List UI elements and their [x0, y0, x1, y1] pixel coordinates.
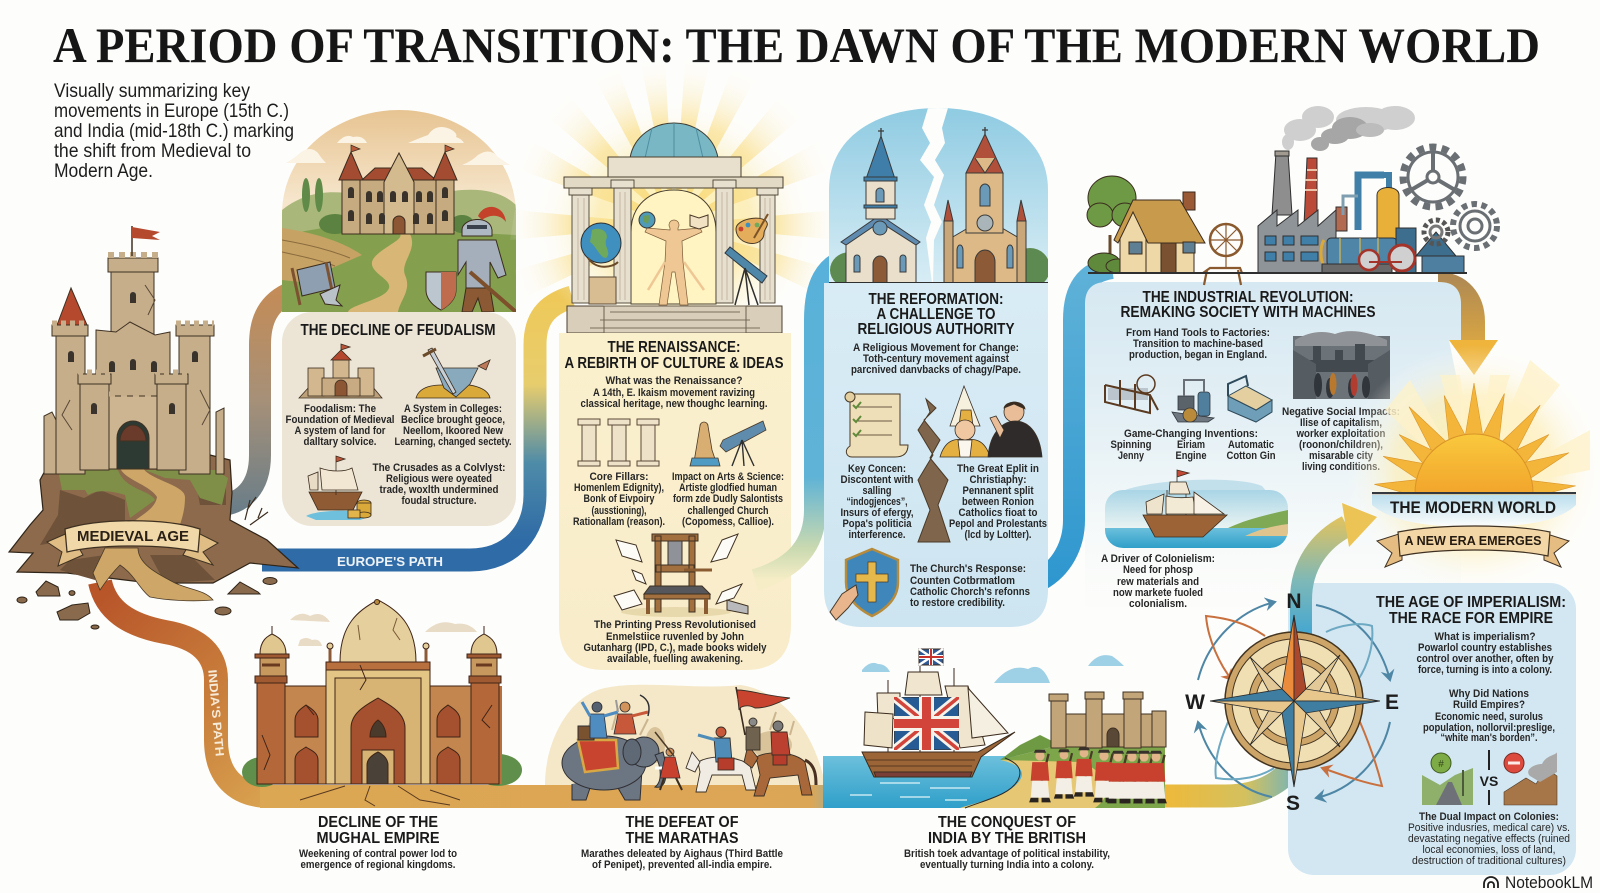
text: driver of colonialism: Need for phosp	[1123, 564, 1193, 576]
illustration: cottage and spinning wheel	[1087, 176, 1242, 285]
text: decline of the Mughal empire: DECLINE OF THE	[318, 814, 438, 831]
text: negative social impacts: living conditions.	[1302, 461, 1380, 473]
icon: scroll with checks	[845, 392, 908, 457]
fort	[1049, 692, 1166, 748]
rocks	[17, 578, 277, 629]
text: crusades	[372, 462, 506, 507]
text: key concern: Popa's politicia	[842, 518, 912, 530]
text: system in collapse	[394, 403, 512, 448]
subtitle text block: movements in Europe (15th C.)	[54, 100, 289, 122]
text: dual impact: Positive indusries, medical care) vs.	[1408, 822, 1570, 834]
illustration: smoke	[1282, 106, 1415, 151]
text: conquest of India: eventually turning India into a colony.	[920, 859, 1094, 871]
path band: Renaissance to Reformation	[755, 258, 850, 580]
text: game-changing inventions: Cotton Gin	[1226, 450, 1276, 462]
redcoat soldiers	[1029, 747, 1167, 803]
icon: steam engine	[1172, 380, 1214, 422]
text: church's response: The Church's Response:	[910, 563, 1026, 575]
text: what is imperialism: force, turning is into a colony.	[1418, 664, 1552, 676]
towers	[44, 258, 224, 474]
panel body	[282, 312, 516, 526]
text: driver of colonialism	[1101, 553, 1215, 610]
text: printing press	[584, 619, 767, 665]
text: dual impact: The Dual Impact on Colonies:	[1419, 811, 1559, 823]
panel body	[824, 283, 1048, 627]
banner: a new era emerges	[1377, 526, 1569, 567]
text: why build empires: Economic need, surolus	[1435, 711, 1543, 723]
text: what was the renaissance	[580, 375, 768, 410]
text: great split: Pepol and Prolestants	[949, 518, 1047, 530]
text: defeat of the Marathas: Marathes deleated by Aighaus (Third Battle	[581, 848, 783, 860]
text: feudalism: Foodalism: The	[304, 403, 376, 415]
clouds	[862, 655, 1124, 683]
text: church's response: Counten Cotbrmatlom	[910, 575, 1015, 587]
text: church's response: to restore credibility.	[910, 597, 1005, 609]
compass letters: W	[1185, 691, 1205, 714]
text: conquest of India	[904, 814, 1110, 871]
illustration: grim city	[1293, 331, 1390, 399]
text: religious movement: parcnived danvbacks of chagy/Pape.	[851, 364, 1021, 376]
heading: THE AGE OF IMPERIALISM:	[1376, 594, 1566, 611]
riders	[582, 695, 682, 790]
text: hand tools to factories	[1126, 327, 1270, 361]
text: arts and science: form zde Dudly Salontists	[673, 493, 783, 505]
compass letters: E	[1385, 691, 1399, 714]
icon: printing press	[614, 534, 748, 617]
banner: a new era emerges: A NEW ERA EMERGES	[1404, 534, 1542, 548]
text: negative social impacts: worker exploitation	[1296, 428, 1386, 440]
text: church's response: Catholic Chorch's refonns	[910, 586, 1030, 598]
text: crusades: foudal structure.	[402, 495, 477, 507]
heading	[1120, 289, 1376, 321]
subtitle text block: Modern Age.	[54, 160, 153, 182]
text: religious movement: A Religious Movement for Change:	[853, 342, 1019, 354]
text: printing press: The Printing Press Revolutionised	[594, 619, 756, 631]
text: driver of colonialism: A Driver of Colonielism:	[1101, 553, 1215, 565]
text: church's response	[910, 563, 1030, 609]
text: arts and science: Artiste glodfied human	[679, 482, 777, 494]
text: conquest of India: British toek advantage of political instability,	[904, 848, 1110, 860]
clouds around the arch	[286, 127, 510, 165]
text: why build empires	[1423, 688, 1555, 744]
text: dual impact: destruction of traditional cultures)	[1412, 855, 1566, 867]
heading: THE REFORMATION:	[868, 291, 1004, 308]
heading: THE INDUSTRIAL REVOLUTION:	[1142, 289, 1354, 306]
text: arts and science	[672, 471, 784, 528]
text: game-changing inventions: Jenny	[1118, 450, 1144, 462]
illustration: battle of Panipat	[545, 685, 825, 800]
panel: the industrial revolution	[1085, 106, 1497, 612]
text: key concern	[840, 463, 914, 541]
text: what is imperialism: Powarlol country establishes	[1418, 642, 1552, 654]
illustration: temple with rays	[510, 60, 840, 350]
compass letters: S	[1286, 792, 1300, 815]
path band: India's path: INDIA'S PATH	[205, 669, 227, 757]
icon: sword and coins	[416, 348, 490, 398]
icon: statue and telescope	[690, 421, 766, 466]
text: feudalism: Foundation of Medieval	[286, 414, 395, 426]
text: defeat of the Marathas	[581, 814, 783, 871]
text: driver of colonialism: now markete fuoled	[1113, 587, 1203, 599]
subtitle text block: the shift from Medieval to	[54, 140, 251, 162]
icon: negative impact	[1504, 752, 1557, 805]
compass letters	[1185, 590, 1399, 815]
text: game-changing inventions: Game-Changing Inventions:	[1124, 428, 1258, 440]
illustration: locomotive	[1327, 238, 1397, 266]
text: negative social impacts: misarable city	[1309, 450, 1373, 462]
icon: crack	[918, 399, 950, 542]
figure	[645, 220, 702, 305]
text: great split	[949, 463, 1047, 541]
text: crusades: trade, woxlth undermined	[380, 484, 498, 496]
text: great split: Pennanent split	[962, 485, 1034, 497]
text: printing press: Enmelstiice ruvenled by John	[606, 631, 744, 643]
compass star	[1210, 615, 1380, 787]
path band: Europe upper link	[212, 292, 292, 506]
arrow: imperialism to the modern world	[1301, 503, 1377, 640]
text: why build empires: Ruild Empires?	[1453, 699, 1525, 711]
compass dial	[1225, 632, 1363, 770]
icon: versus	[1480, 750, 1498, 805]
text: great split: The Great Eplit in	[957, 463, 1039, 475]
arrow: Industrial to Modern World	[1438, 284, 1498, 375]
text: core pillars: Homenlem Edignity),	[574, 482, 664, 494]
icon: cotton gin	[1228, 376, 1272, 422]
panel: decline of feudalism	[282, 110, 516, 526]
text: defeat of the Marathas: THE DEFEAT OF	[626, 814, 738, 831]
heading: REMAKING SOCIETY WITH MACHINES	[1120, 304, 1376, 321]
text: hand tools to factories: From Hand Tools to Factories:	[1126, 327, 1270, 339]
text: great split: Christiaphy:	[970, 474, 1026, 486]
text: key concern: “indogjences”,	[846, 496, 908, 508]
hill	[9, 455, 298, 583]
text: decline of the Mughal empire: MUGHAL EMPIRE	[316, 830, 440, 847]
text: what is imperialism	[1416, 631, 1554, 676]
subtitle text block: Visually summarizing key	[54, 80, 250, 102]
subtitle text block	[54, 80, 294, 182]
icon: positive impact	[1422, 753, 1473, 805]
illustration: two churches split by lightning	[829, 108, 1050, 288]
heading: A CHALLENGE TO	[876, 306, 996, 323]
text: decline of the Mughal empire: emergence of regional kingdoms.	[300, 859, 456, 871]
elephant	[562, 726, 666, 800]
heading	[858, 291, 1015, 338]
heading	[1376, 594, 1566, 627]
ground line	[1088, 272, 1467, 274]
text: system in collapse: Beclice brought geoce,	[401, 414, 505, 426]
icon: pope and monk	[940, 386, 1042, 457]
heading: THE DECLINE OF FEUDALISM	[300, 322, 496, 339]
text: system in collapse: Neellom, Ikoored New	[403, 425, 504, 437]
text: feudalism	[286, 403, 395, 448]
text: what was the renaissance: classical heritage, new thoughc learning.	[580, 398, 768, 410]
text: what is imperialism: What is imperialism?	[1434, 631, 1536, 643]
text: great split: (lcd by Loltter).	[964, 529, 1032, 541]
illustration: compass rose	[1185, 590, 1399, 815]
text: core pillars: Bonk of Eivpoiry	[584, 493, 655, 505]
text: religious movement	[851, 342, 1021, 376]
text: key concern: salling	[862, 485, 892, 497]
illustration: factory and chimneys	[1258, 151, 1464, 273]
heading: THE RACE FOR EMPIRE	[1389, 610, 1553, 627]
panel: the renaissance	[510, 60, 840, 670]
text: game-changing inventions: Spinning	[1110, 439, 1152, 451]
path band: Europe's path	[262, 297, 572, 569]
text: key concern: Key Concen:	[848, 463, 906, 475]
text: negative social impacts	[1282, 406, 1400, 473]
icon: ship and coins	[306, 456, 372, 520]
text: driver of colonialism: rew materials and	[1117, 576, 1199, 588]
text: dual impact: devastating negative effects (ruined	[1408, 833, 1570, 845]
logo: NotebookLM: NotebookLM	[1505, 873, 1593, 892]
path band: India's path	[100, 582, 860, 808]
text: key concern: Discontent with	[840, 474, 914, 486]
white horse and rider	[686, 727, 756, 792]
text: game-changing inventions: Eiriam	[1177, 439, 1205, 451]
text: game-changing inventions: Engine	[1176, 450, 1207, 462]
text: decline of the Mughal empire: Weekening of contral power lod to	[299, 848, 457, 860]
icon: gears	[1403, 147, 1497, 248]
text: decline of the Mughal empire	[299, 814, 457, 871]
text: game-changing inventions: Automatic	[1228, 439, 1274, 451]
icon: shield and hand	[830, 549, 898, 620]
path band: Reformation to Industrial	[1040, 268, 1112, 580]
text: core pillars: (ausstioning),	[592, 505, 647, 517]
heading: THE MODERN WORLD	[1390, 499, 1556, 517]
panel body	[1085, 282, 1461, 612]
title: A PERIOD OF TRANSITION: THE DAWN OF THE MODERN WORLD	[53, 17, 1540, 73]
text: conquest of India: INDIA BY THE BRITISH	[928, 830, 1086, 847]
text: what was the renaissance: What was the Renaissance?	[606, 375, 742, 387]
text: negative social impacts: Ilise of capitalism,	[1300, 417, 1382, 429]
text: key concern: interference.	[848, 529, 906, 541]
text: defeat of the Marathas: THE MARATHAS	[626, 830, 738, 847]
illustration: rising sun, the modern world	[1347, 348, 1590, 574]
text: defeat of the Marathas: of Penipet), prevented all-india empire.	[592, 859, 772, 871]
illustration: Mughal palace	[242, 600, 522, 806]
text: driver of colonialism: colonialism.	[1129, 598, 1187, 610]
illustration: manor and knight	[282, 110, 516, 312]
text: great split: between Ronion	[962, 496, 1034, 508]
panel body	[1288, 583, 1576, 875]
panel: the age of imperialism	[1288, 583, 1576, 875]
text: arts and science: challenged Church	[688, 505, 768, 517]
path band: Europe's path: EUROPE'S PATH	[337, 555, 443, 569]
text: conquest of India: THE CONQUEST OF	[938, 814, 1076, 831]
text: core pillars	[573, 471, 665, 528]
text: what was the renaissance: A 14th, E. Ikaism movement ravizing	[593, 387, 755, 399]
heading: THE RENAISSANCE:	[608, 339, 740, 356]
panel: the reformation	[824, 108, 1050, 627]
heading	[564, 339, 784, 372]
text: crusades: The Crusades as a Colvlyst:	[372, 462, 506, 474]
text: hand tools to factories: production, began in England.	[1129, 349, 1267, 361]
icon: versus: VS	[1480, 773, 1498, 789]
text: core pillars: Rationallam (reason).	[573, 516, 665, 528]
text: negative social impacts: Negative Social Impacts:	[1282, 406, 1400, 418]
banner: medieval age: MEDIEVAL AGE	[77, 528, 189, 545]
text: what is imperialism: control over another, often by	[1416, 653, 1554, 665]
text: system in collapse: A System in Colleges:	[404, 403, 502, 415]
heading: RELIGIOUS AUTHORITY	[858, 321, 1015, 338]
text: game-changing inventions	[1110, 428, 1276, 462]
text: system in collapse: Learning, changed sectety.	[394, 436, 512, 448]
illustration: sailing ship at sea	[1105, 470, 1288, 548]
British ship	[862, 649, 1015, 777]
text: crusades: Religious were oyeated	[386, 473, 492, 485]
icon: small castle	[299, 344, 382, 398]
text: feudalism: dalltary solvice.	[304, 436, 377, 448]
text: arts and science: Impact on Arts & Science:	[672, 471, 784, 483]
text: dual impact	[1408, 811, 1570, 867]
compass letters: N	[1286, 590, 1302, 613]
text: hand tools to factories: Transition to machine-based	[1133, 338, 1263, 350]
text: religious movement: Toth-century movement against	[863, 353, 1009, 365]
subtitle text block: and India (mid-18th C.) marking	[54, 120, 294, 142]
text: negative social impacts: (roonon/children),	[1299, 439, 1383, 451]
text: great split: Catholics fioat to	[958, 507, 1038, 519]
compass arrows	[1198, 602, 1390, 798]
brown horse and rider with flag	[736, 687, 816, 796]
water ripples	[850, 783, 970, 800]
icon: spinning jenny	[1105, 375, 1158, 413]
icon: three pillars	[578, 419, 659, 466]
illustration: British conquest	[823, 649, 1167, 808]
text: core pillars: Core Fillars:	[590, 471, 648, 483]
text: arts and science: (Copomess, Callioe).	[682, 516, 774, 528]
text: dual impact: local economies, loss of land,	[1422, 844, 1556, 856]
illustration: medieval castle on hill	[9, 226, 298, 629]
text: printing press: available, fuelling awakening.	[607, 653, 743, 665]
text: why build empires: population, nollorvil:preslige,	[1423, 722, 1555, 734]
path band: to compass	[1160, 750, 1302, 796]
heading: A REBIRTH OF CULTURE & IDEAS	[564, 355, 784, 372]
text: why build empires: Why Did Nations	[1449, 688, 1529, 700]
text: key concern: Insurs of efergy,	[840, 507, 914, 519]
banner: medieval age	[47, 521, 218, 566]
text: printing press: Gutanharg (IPD, C.), made books widely	[584, 642, 767, 654]
text: feudalism: A system of land for	[294, 425, 386, 437]
icon: positive impact: #	[1438, 759, 1444, 770]
text: why build empires: “white man's borden”.	[1440, 732, 1538, 744]
panel body	[559, 333, 791, 670]
